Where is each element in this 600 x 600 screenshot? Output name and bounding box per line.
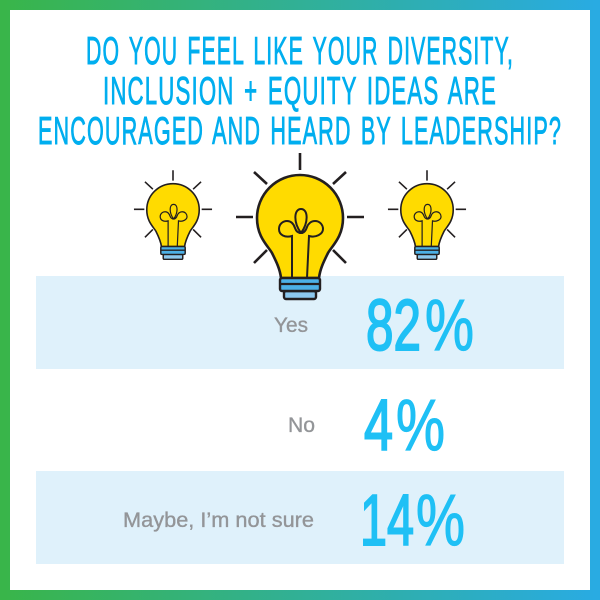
value: 4%: % — [396, 386, 445, 466]
icon: left light bulb — [134, 170, 212, 259]
band: Maybe row — [36, 471, 564, 564]
icon: centre light bulb — [236, 153, 364, 299]
label: Yes: Yes — [274, 314, 308, 337]
value: 14%: % — [416, 481, 465, 561]
icon: right light bulb — [388, 170, 466, 259]
band: Yes row — [36, 276, 564, 369]
value: 82%: % — [425, 286, 474, 366]
value: 4%: 4 — [364, 386, 393, 466]
value: 4% — [364, 386, 445, 466]
value: 82%: 82 — [366, 286, 421, 366]
value: 14%: 14 — [360, 481, 414, 561]
title — [38, 30, 562, 153]
label: No: No — [288, 414, 315, 437]
label: Maybe, I'm not sure: Maybe, I’m not sure — [123, 509, 314, 532]
